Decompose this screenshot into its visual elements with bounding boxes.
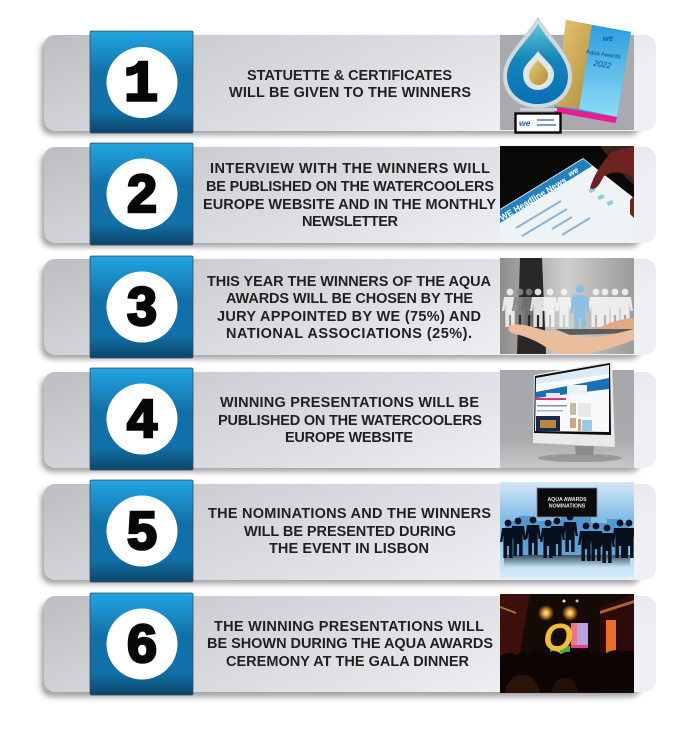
row 4 number badge bbox=[106, 384, 178, 454]
row 5 number badge bbox=[106, 496, 178, 566]
row 3 text: JURY APPOINTED BY WE (75%) AND bbox=[217, 309, 481, 325]
row 6 image: gala stage and crowd: Q bbox=[543, 617, 573, 659]
row 6 text bbox=[207, 619, 493, 670]
row 1 text: WILL BE GIVEN TO THE WINNERS bbox=[229, 85, 471, 101]
row 3 number badge: 3 bbox=[127, 277, 157, 337]
row 4 ribbon bbox=[90, 368, 193, 470]
row 6 image: gala stage and crowd bbox=[500, 594, 634, 693]
row 4 image: desktop monitor bbox=[500, 361, 634, 468]
row 2 image: tablet with newsletter: we bbox=[566, 165, 581, 179]
row 3 ribbon bbox=[90, 256, 193, 358]
row 4 text: PUBLISHED ON THE WATERCOOLERS bbox=[218, 413, 482, 429]
row 2 panel bbox=[41, 143, 656, 247]
row 5 text bbox=[208, 506, 491, 557]
row 4 text bbox=[218, 395, 482, 446]
row 3 text: AWARDS WILL BE CHOSEN BY THE bbox=[226, 291, 473, 307]
row 3 text: NATIONAL ASSOCIATIONS (25%). bbox=[226, 326, 472, 342]
row 6 panel bbox=[41, 593, 656, 697]
row 4 number badge: 4 bbox=[127, 389, 157, 449]
row 3 panel bbox=[41, 256, 656, 359]
row 6 text: THE WINNING PRESENTATIONS WILL bbox=[214, 619, 484, 635]
row 2 image: tablet with newsletter bbox=[498, 146, 634, 242]
row 1 number badge: 1 bbox=[124, 54, 158, 118]
row 2 ribbon bbox=[90, 143, 193, 245]
row 5 image: silhouettes under nominations screen bbox=[500, 482, 637, 578]
row 5 ribbon bbox=[90, 480, 193, 582]
row 6 number badge: 6 bbox=[127, 614, 157, 674]
row 6 text: CEREMONY AT THE GALA DINNER bbox=[226, 654, 470, 670]
row 3 number badge bbox=[106, 272, 178, 342]
row 2 text: NEWSLETTER bbox=[302, 214, 399, 230]
row 2 text: INTERVIEW WITH THE WINNERS WILL bbox=[210, 161, 490, 177]
row 2 text: EUROPE WEBSITE AND IN THE MONTHLY bbox=[203, 197, 496, 213]
row 1 image: statuette and certificate bbox=[500, 17, 634, 132]
row 6 text: BE SHOWN DURING THE AQUA AWARDS bbox=[207, 636, 493, 652]
row 1 text bbox=[229, 68, 471, 101]
row 4 text: EUROPE WEBSITE bbox=[285, 430, 413, 446]
row 1 text: STATUETTE & CERTIFICATES bbox=[247, 68, 452, 84]
row 1 image: statuette and certificate: Aqua Awards bbox=[585, 49, 621, 61]
row 5 text: THE EVENT IN LISBON bbox=[269, 541, 429, 557]
row 1 panel bbox=[41, 17, 656, 135]
row 2 image: tablet with newsletter: WE Headline News bbox=[498, 175, 568, 223]
row 1 image: statuette and certificate: we bbox=[519, 118, 531, 128]
row 2 text bbox=[203, 161, 496, 230]
row 3 text: THIS YEAR THE WINNERS OF THE AQUA bbox=[207, 274, 492, 290]
row 1 number badge bbox=[106, 47, 178, 118]
row 6 ribbon bbox=[90, 593, 193, 695]
row 5 text: THE NOMINATIONS AND THE WINNERS bbox=[208, 506, 491, 522]
row 1 ribbon bbox=[90, 31, 193, 133]
row 4 panel bbox=[41, 361, 656, 472]
statuette drop bbox=[503, 17, 572, 108]
row 2 text: BE PUBLISHED ON THE WATERCOOLERS bbox=[206, 179, 494, 195]
row 1 image: statuette and certificate: we bbox=[603, 34, 614, 43]
row 1 image: statuette and certificate: 2022 bbox=[592, 59, 612, 70]
row 3 text bbox=[207, 274, 492, 342]
row 6 number badge bbox=[106, 608, 178, 680]
row 2 number badge: 2 bbox=[127, 164, 157, 224]
row 5 panel bbox=[41, 480, 656, 584]
row 3 image: hand holding people on tablet bbox=[500, 258, 634, 354]
row 5 text: WILL BE PRESENTED DURING bbox=[244, 524, 456, 540]
row 5 image: silhouettes under nominations screen: NOMINATIONS bbox=[549, 504, 586, 510]
row 5 number badge: 5 bbox=[127, 501, 157, 561]
row 5 image: silhouettes under nominations screen: AQUA AWARDS bbox=[547, 497, 587, 503]
row 2 number badge bbox=[106, 158, 178, 230]
row 4 text: WINNING PRESENTATIONS WILL BE bbox=[220, 395, 479, 411]
